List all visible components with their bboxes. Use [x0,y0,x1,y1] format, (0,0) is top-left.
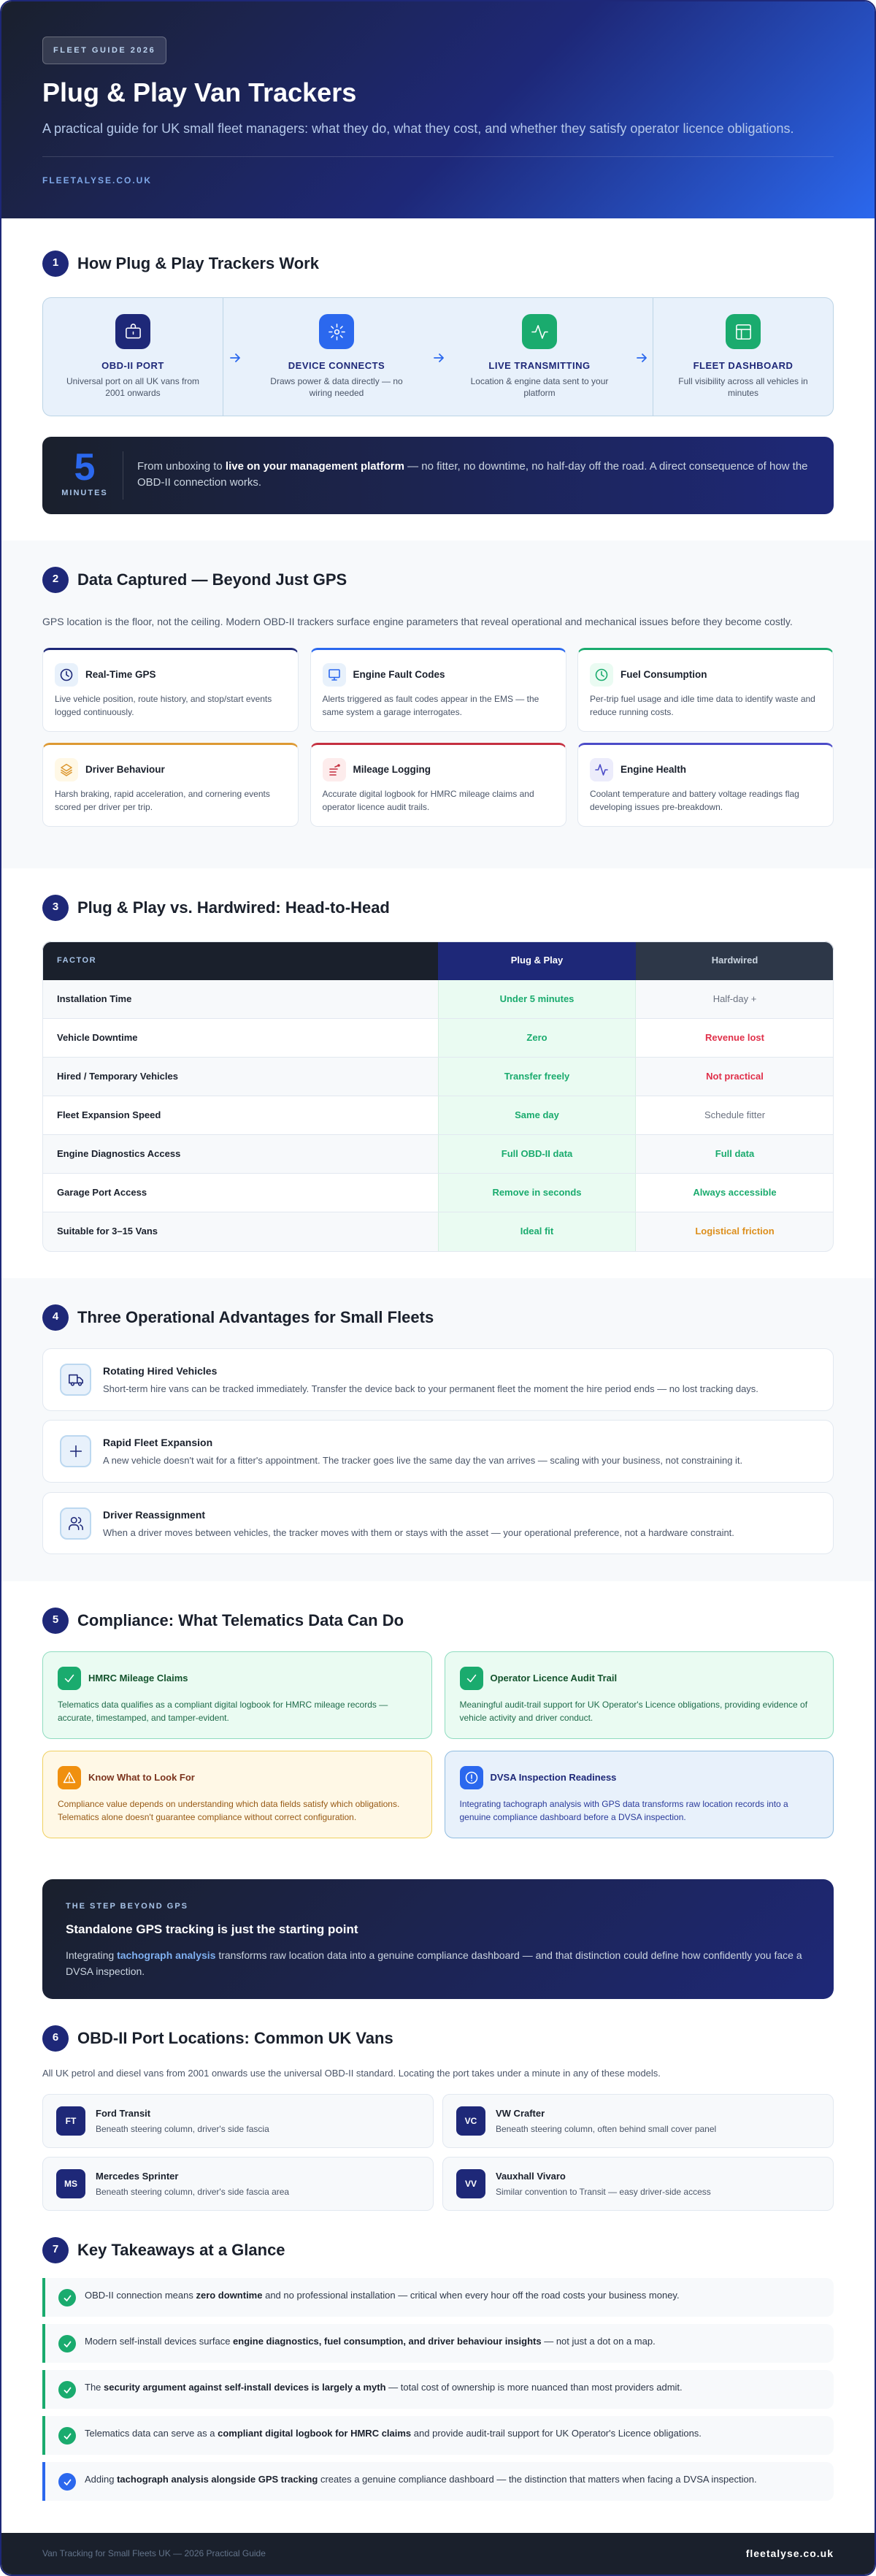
badge: MS [64,2179,77,2189]
icon: check [58,1667,81,1690]
section 5 heading: Compliance: What Telematics Data Can Do [77,1611,404,1629]
arrow [434,353,444,362]
row: installation time [42,980,834,1019]
icon: check [58,2289,76,2306]
step: live transmitting [471,314,609,398]
row: garage port: Garage Port Access [57,1187,147,1198]
arrow [230,353,240,362]
section 7 heading: 7 [53,2243,58,2255]
advantage text: A new vehicle doesn't wait for a fitter's appointment. The tracker goes live the same day the van arrives — scaling with your business, not constraining it. [103,1455,742,1466]
icon: port [115,314,150,349]
row: hired vehicles [42,1058,834,1096]
icon: check [58,2335,76,2353]
row: expansion speed [42,1096,834,1135]
card title: Fuel Consumption [620,669,707,680]
row: vehicle downtime [42,1019,834,1058]
panel: 5 minutes stat [42,437,834,514]
row: installation time: Under 5 minutes [500,993,574,1004]
row: diagnostics: Full data [715,1148,754,1159]
badge: VC [465,2116,477,2126]
step description: Location & engine data sent to your platform [471,376,608,398]
section 3 heading: Plug & Play vs. Hardwired: Head-to-Head [77,898,390,917]
advantage text: When a driver moves between vehicles, the tracker moves with them or stays with the asset — your operational preference, not a hardware constraint. [103,1527,734,1538]
step title: FLEET DASHBOARD [694,360,793,371]
section 2 heading: 2 [53,573,58,585]
row: suitability [42,1212,834,1252]
row: diagnostics: Engine Diagnostics Access [57,1148,180,1159]
port location: Beneath steering column, driver's side fascia area [96,2187,289,2197]
icon: check [460,1667,483,1690]
section 6 heading: OBD-II Port Locations: Common UK Vans [77,2029,393,2047]
section 2 heading [42,567,347,593]
icon: check [58,2381,76,2399]
table header [42,941,834,980]
card: driver behaviour [42,743,299,827]
icon: dashboard [726,314,761,349]
stat label: MINUTES [61,489,108,497]
row: hired vehicles: Hired / Temporary Vehicles [57,1071,178,1082]
icon: check [58,2427,76,2445]
table header: FACTOR [57,956,96,965]
section 3 heading: 3 [53,901,58,913]
step title: DEVICE CONNECTS [288,360,385,371]
card text: Coolant temperature and battery voltage readings flag developing issues pre-breakdown. [590,789,799,812]
card text: Telematics data qualifies as a compliant digital logbook for HMRC mileage records — accurate, timestamped, and tamper-evident. [58,1700,388,1723]
icon: check [58,2473,76,2491]
card: real-time GPS [42,648,299,732]
takeaway text: OBD-II connection means zero downtime and no professional installation — critical when every hour off the road costs your business money. [85,2290,680,2301]
step description: Draws power & data directly — no wiring needed [270,376,403,398]
section 2 heading: Data Captured — Beyond Just GPS [77,570,347,589]
card text: Harsh braking, rapid acceleration, and cornering events scored per driver per trip. [55,789,270,812]
port location: Similar convention to Transit — easy driver-side access [496,2187,711,2197]
port location: Beneath steering column, often behind small cover panel [496,2124,716,2134]
stat text: From unboxing to live on your management platform — no fitter, no downtime, no half-day off the road. A direct consequence of how the OBD-II connection works. [137,460,808,489]
van name: VW Crafter [496,2108,545,2119]
step: OBD-II port [66,314,199,398]
footer note: Van Tracking for Small Fleets UK — 2026 Practical Guide [42,2548,266,2558]
footer brand: fleetalyse.co.uk [746,2548,834,2559]
row: vehicle downtime: Vehicle Downtime [57,1032,138,1043]
step description: Full visibility across all vehicles in minutes [678,376,808,398]
card: fuel consumption [577,648,834,732]
takeaway text: The security argument against self-install devices is largely a myth — total cost of ownership is more nuanced than most providers admit. [85,2382,683,2393]
card text: Alerts triggered as fault codes appear in the EMS — the same system a garage interrogates. [323,694,539,717]
table header: Hardwired [712,955,758,966]
row: installation time: Installation Time [57,993,131,1004]
row: diagnostics: Full OBD-II data [502,1148,572,1159]
row: garage port: Always accessible [693,1187,777,1198]
row: expansion speed: Same day [515,1109,559,1120]
row: garage port: Remove in seconds [492,1187,582,1198]
icon: clock green [590,663,613,687]
card: HMRC mileage claims [42,1651,432,1739]
advantage text: Short-term hire vans can be tracked immediately. Transfer the device back to your permanent fleet the moment the hire period ends — no lost tracking days. [103,1383,758,1394]
step title: LIVE TRANSMITTING [488,360,591,371]
card: VW Crafter [442,2094,834,2148]
card title: Engine Fault Codes [353,669,445,680]
badge [56,2169,85,2198]
icon: plus [60,1435,91,1467]
takeaway text: Telematics data can serve as a compliant digital logbook for HMRC claims and provide audit-trail support for UK Operator's Licence obligations. [85,2428,702,2439]
icon: users [60,1507,91,1540]
card title: Real-Time GPS [85,669,156,680]
badge: FT [66,2116,76,2126]
advantage: rapid fleet expansion [42,1420,834,1483]
row: vehicle downtime: Zero [526,1032,548,1043]
advantage title: Driver Reassignment [103,1509,205,1521]
badge: VV [465,2179,477,2189]
comparison table [42,941,834,1252]
icon: clock [55,663,78,687]
icon: layers [55,758,78,781]
section 2 intro: GPS location is the floor, not the ceiling. Modern OBD-II trackers surface engine parameters that reveal operational and mechanical issues before they become costly. [42,616,793,627]
section 5 heading [42,1608,404,1634]
section 4 heading [42,1304,434,1331]
card: Mercedes Sprinter [42,2157,434,2211]
site link: FLEETALYSE.CO.UK [42,175,152,186]
section 3 heading [42,895,390,921]
badge [456,2169,485,2198]
table header: Plug & Play [511,955,563,966]
van name: Ford Transit [96,2108,150,2119]
row: diagnostics [42,1135,834,1174]
section 4 heading: Three Operational Advantages for Small Fleets [77,1308,434,1326]
icon: truck [60,1364,91,1396]
step: device connects [270,314,403,398]
card title: HMRC Mileage Claims [88,1673,188,1683]
card title: Mileage Logging [353,764,431,775]
takeaway 4 [42,2416,834,2455]
row: expansion speed: Fleet Expansion Speed [57,1109,161,1120]
section 7 heading [42,2237,285,2263]
eyebrow: THE STEP BEYOND GPS [66,1902,188,1911]
section 2 background [0,540,876,868]
row: vehicle downtime: Revenue lost [705,1032,764,1043]
card title: Engine Health [620,764,686,775]
panel: how it works flow [42,297,834,416]
takeaway 2 [42,2324,834,2363]
section 1 heading [42,251,319,277]
row: garage port [42,1174,834,1212]
section 1 heading: 1 [53,256,58,269]
card: engine health [577,743,834,827]
takeaway 1 [42,2278,834,2317]
card text: Meaningful audit-trail support for UK Operator's Licence obligations, providing evidence of vehicle activity and driver conduct. [460,1700,807,1723]
card title: Know What to Look For [88,1772,195,1783]
card text: Compliance value depends on understanding which data fields satisfy which obligations. Telematics alone doesn't guarantee compliance without correct configuration. [58,1799,399,1822]
badge: fleet guide 2026 [42,37,166,64]
section 1 heading: How Plug & Play Trackers Work [77,254,319,272]
card text: Integrating tachograph analysis with GPS data transforms raw location records into a genuine compliance dashboard before a DVSA inspection. [460,1799,788,1822]
card title: Operator Licence Audit Trail [491,1673,617,1683]
icon: pulse [590,758,613,781]
step: fleet dashboard [678,314,808,398]
icon: warning [58,1766,81,1789]
card text: Live vehicle position, route history, and stop/start events logged continuously. [55,694,272,717]
section 4 heading: 4 [53,1310,58,1323]
van name: Vauxhall Vivaro [496,2171,566,2182]
card title: Driver Behaviour [85,764,165,775]
header banner [0,0,876,218]
card: Vauxhall Vivaro [442,2157,834,2211]
section 6 intro: All UK petrol and diesel vans from 2001 onwards use the universal OBD-II standard. Locating the port takes under a minute in any of these models. [42,2068,661,2079]
badge: fleet guide 2026: FLEET GUIDE 2026 [53,46,155,55]
van name: Mercedes Sprinter [96,2171,178,2182]
footer [0,2533,876,2576]
section 6 heading [42,2025,393,2052]
section 5 heading: 5 [53,1613,58,1626]
icon: monitor [323,663,346,687]
arrow [637,353,647,362]
section 7 heading: Key Takeaways at a Glance [77,2241,285,2259]
icon: activity [522,314,557,349]
callout: the step beyond GPS [42,1879,834,1999]
badge [456,2106,485,2136]
takeaway 5 [42,2462,834,2501]
card: know what to look for [42,1751,432,1838]
card title: DVSA Inspection Readiness [491,1772,616,1783]
advantage title: Rotating Hired Vehicles [103,1365,217,1377]
card: Ford Transit [42,2094,434,2148]
advantage: driver reassignment [42,1492,834,1554]
icon: sun [319,314,354,349]
row: expansion speed: Schedule fitter [704,1109,765,1120]
step description: Universal port on all UK vans from 2001 onwards [66,376,199,398]
row: hired vehicles: Transfer freely [504,1071,569,1082]
takeaway 3 [42,2370,834,2409]
icon: info [460,1766,483,1789]
callout text: Integrating tachograph analysis transforms raw location data into a genuine compliance dashboard — and that distinction could define how confidently you face a DVSA inspection. [66,1949,802,1977]
title: Plug & Play Van Trackers [42,77,356,107]
advantage title: Rapid Fleet Expansion [103,1437,212,1448]
takeaway text: Adding tachograph analysis alongside GPS tracking creates a genuine compliance dashboard — the distinction that matters when facing a DVSA inspection. [85,2474,757,2485]
card: mileage logging [310,743,566,827]
card: operator licence audit trail [444,1651,834,1739]
row: suitability: Suitable for 3–15 Vans [57,1226,158,1237]
card: engine fault codes [310,648,566,732]
icon: list with marker [323,758,346,781]
row: suitability: Logistical friction [695,1226,775,1237]
subtitle: A practical guide for UK small fleet managers: what they do, what they cost, and whether they satisfy operator licence obligations. [42,121,794,136]
card text: Per-trip fuel usage and idle time data to identify waste and reduce running costs. [590,694,815,717]
step title: OBD-II PORT [101,360,164,371]
section 6 heading: 6 [53,2031,58,2044]
row: hired vehicles: Not practical [706,1071,764,1082]
callout title: Standalone GPS tracking is just the starting point [66,1922,358,1936]
row: suitability: Ideal fit [520,1226,553,1237]
card text: Accurate digital logbook for HMRC mileage claims and operator licence audit trails. [323,789,534,812]
advantage: rotating hired vehicles [42,1348,834,1411]
port location: Beneath steering column, driver's side fascia [96,2124,269,2134]
card: DVSA inspection readiness [444,1751,834,1838]
section 4 background [0,1278,876,1581]
row: installation time: Half-day + [713,993,756,1004]
badge [56,2106,85,2136]
takeaway text: Modern self-install devices surface engine diagnostics, fuel consumption, and driver behaviour insights — not just a dot on a map. [85,2336,656,2347]
stat number: 5 [74,446,95,489]
